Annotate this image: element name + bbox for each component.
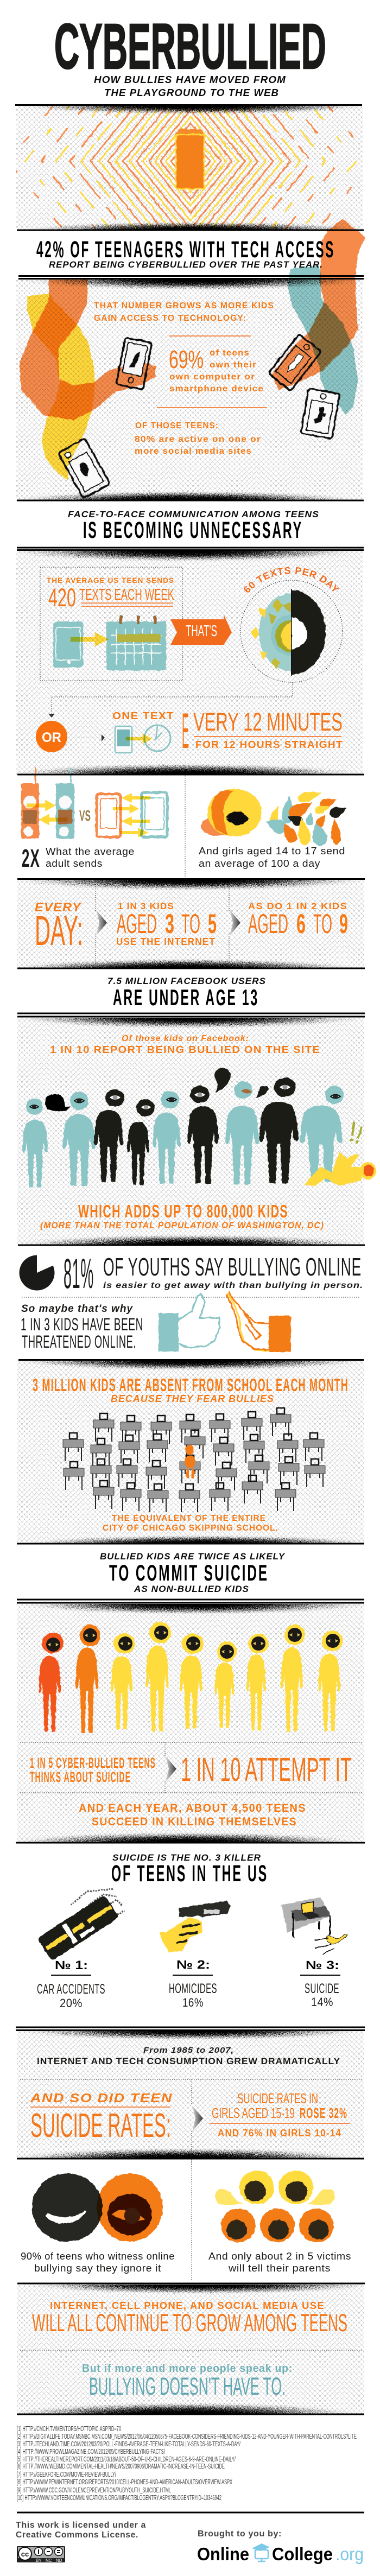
text block: aged 6 to 9: 9 (339, 909, 348, 939)
text block: one text every 12 minutes: FOR 12 HOURS STRAIGHT (195, 739, 343, 750)
text block: 2 in 5 tell parents: And only about 2 in 5 victims (208, 2250, 351, 2262)
text block: aged 6 to 9: TO (313, 909, 332, 939)
stat: 81 percent of youths (64, 1249, 363, 1297)
text block: equivalent of chicago: CITY OF CHICAGO SKIPPING SCHOOL. (103, 1524, 278, 1533)
icon: concentric radiating diamonds (16, 106, 357, 229)
icon: orange phone (175, 129, 204, 189)
text block: technology access: own computer or (169, 372, 255, 382)
footer: brought to you by: Online (197, 2544, 249, 2564)
heading: no. 3 killer of teens (111, 1853, 268, 1887)
stat: no. 3 suicide: 14% (311, 1995, 333, 2009)
text block: 2x what adults send: adult sends (46, 858, 103, 869)
stat: no. 3 suicide: № 3: (306, 1958, 339, 1972)
text block: 90 percent ignore (21, 2250, 175, 2274)
icon: phone and clock (115, 725, 170, 753)
illustration: crowd of kids with a bully (22, 1068, 376, 1188)
illustration: ignoring heads (32, 2173, 163, 2242)
text block: kids bullied on facebook: 1 IN 10 REPORT BEING BULLIED ON THE SITE (50, 1044, 320, 1055)
text block: suicide rates in girls: SUICIDE RATES IN (237, 2090, 318, 2107)
arrow: that's ribbon (170, 614, 232, 645)
illustration: smartphones exchanging texts (97, 792, 167, 837)
text block: threatened online: THREATENED ONLINE. (22, 1332, 136, 1352)
icon: monitor with graduation cap (252, 2543, 270, 2561)
text block: 2x what adults send: What the average (46, 846, 135, 857)
footer: brought to you by (197, 2529, 364, 2564)
footer: brought to you by: .org (335, 2544, 364, 2564)
icon: phone dropped from blue hand (301, 389, 340, 439)
heading: twice as likely to commit suicide: BULLIED KIDS ARE TWICE AS LIKELY (100, 1552, 286, 1562)
text block: 2 in 5 tell parents (208, 2250, 351, 2274)
arrow: dotted connector from clock to OR (48, 682, 293, 718)
source references: [1] HTTP://CMCH.TV/MENTORS/HOTTOPIC.ASP?ID=70 (17, 2425, 121, 2433)
text block: 1985 to 2007: From 1985 to 2007, (143, 2046, 234, 2055)
text block: technology access: of teens (210, 348, 250, 358)
icon: phone held by yellow hand (58, 438, 110, 499)
text block: technology access: own their (210, 360, 257, 370)
panel: facebook background (17, 1018, 364, 1245)
heading: twice as likely to commit suicide: TO COMMIT SUICIDE (109, 1560, 269, 1585)
illustration: right orange arm (273, 220, 364, 389)
stat: no. 3 suicide (300, 1958, 340, 2009)
text block: 1985 to 2007 (37, 2046, 340, 2066)
text block: 1 in 5 think, 1 in 10 attempt: THINKS ABOUT SUICIDE (30, 1769, 131, 1785)
icon: phone held in left hand (116, 338, 152, 390)
panel: suicide rates background (17, 2031, 364, 2159)
text block: equivalent of chicago: THE EQUIVALENT OF THE ENTIRE (112, 1514, 266, 1523)
text block: suicide rates in girls: ROSE 32% (300, 2105, 347, 2121)
illustration: left orange arm (21, 280, 155, 419)
text block: bullying doesn't have to: But if more and more people speak up: (82, 2363, 293, 2375)
stat: no. 2 homicides: 16% (182, 1996, 204, 2009)
arrow: that's ribbon: THAT'S (186, 623, 217, 640)
licence note (16, 2521, 146, 2540)
text block: aged 6 to 9: 6 (296, 909, 306, 939)
text block: and so did teen suicide rates (30, 2091, 173, 2144)
source references: [10] HTTP://WWW.VOXTEENCOMMUNICATIONS.ORG/IMPACT/BLOGENTRY.ASPX?BLOGENTRYID=10346942 (17, 2493, 221, 2502)
icon: OR circle: OR (42, 730, 61, 745)
arrow: chevron to rates (192, 2105, 203, 2131)
illustration: brick phones exchanging texts (21, 767, 74, 839)
text block: one text every 12 minutes: ONE TEXT (112, 710, 174, 721)
text block: kids bullied on facebook: Of those kids on Facebook: (122, 1034, 249, 1043)
heading: facebook users under 13: 7.5 MILLION FACEBOOK USERS (107, 976, 266, 986)
icon: creative commons badge: ND (56, 2558, 62, 2563)
text block: aged 3 to 5: AGED (117, 909, 157, 939)
icon: creative commons badge: NC (46, 2558, 52, 2563)
text block: 800,000 kids: (MORE THAN THE TOTAL POPULATION OF WASHINGTON, DC) (40, 1221, 324, 1230)
icon: orange kid at desk (185, 1445, 195, 1479)
callout: 420 texts each week box: THE AVERAGE US TEEN SENDS (47, 576, 174, 585)
text block: technology access: 80% are active on one or (135, 435, 261, 444)
callout: 420 texts each week box: 420 (48, 583, 76, 612)
stat: no. 3 suicide: SUICIDE (305, 1981, 339, 1996)
stat: no. 2 homicides: HOMICIDES (169, 1981, 217, 1996)
text block: 4,500 teens: SUCCEED IN KILLING THEMSELVES (92, 1816, 297, 1828)
text block: 800,000 kids (40, 1201, 324, 1230)
text block: aged 3 to 5 (116, 901, 217, 947)
text block: 3 million kids absent (33, 1375, 349, 1404)
icon: yellow fallen kid (304, 1152, 363, 1186)
text block: aged 6 to 9: AGED (248, 909, 288, 939)
panel text: every day: EVERY (35, 900, 82, 914)
arrow: brick phone texts (27, 800, 67, 826)
text block: girls 14 to 17 (199, 846, 345, 869)
icon: speeding car (37, 1889, 125, 1961)
text block: 2x what adults send: 2X (22, 844, 40, 872)
text block: technology access (94, 301, 274, 456)
text block: technology access: THAT NUMBER GROWS AS MORE KIDS (94, 301, 274, 310)
text block: one text every 12 minutes: E (182, 703, 189, 759)
source references: [4] HTTP://WWW.PROWLMAGAZINE.COM/2012/05/CYBERBULLYING-FACTS/ (17, 2447, 165, 2456)
subtitle (94, 74, 286, 98)
text block: aged 6 to 9 (248, 901, 348, 939)
icon: handgun in hand (159, 1901, 230, 1952)
source references (17, 2425, 357, 2502)
icon: black speech bubbles (45, 1094, 71, 1111)
stat: no. 1 car accidents: CAR ACCIDENTS (37, 1982, 105, 1997)
text block: technology access: 69% (169, 345, 204, 373)
illustration: right blue arm (289, 266, 357, 414)
text block: 1985 to 2007: INTERNET AND TECH CONSUMPTION GREW DRAMATICALLY (37, 2056, 340, 2066)
footer: brought to you by: College (272, 2544, 333, 2564)
panel: texting background (16, 551, 363, 775)
text block: threatened online: 1 IN 3 KIDS HAVE BEEN (21, 1315, 143, 1334)
illustration: row of nine teens (39, 1622, 343, 1733)
text block: technology access: GAIN ACCESS TO TECHNOLOGY: (94, 314, 246, 323)
stat: no. 2 homicides: № 2: (176, 1958, 210, 1971)
arrow: OR to one text (68, 734, 105, 741)
source references: [9] HTTP://WWW.CDC.GOV/VIOLENCEPREVENTION/PUB/YOUTH_SUICIDE.HTML (17, 2486, 171, 2494)
text block: and so did teen suicide rates: AND SO DID TEEN (30, 2091, 173, 2105)
icon: creative commons badge: cc (21, 2550, 29, 2558)
text block: threatened online: So maybe that's why (21, 1303, 133, 1315)
illustration: left yellow arm (28, 295, 94, 479)
icon: desk with laptop and tipped chair (281, 1897, 347, 1954)
chart: 81 percent pie wedge (20, 1255, 54, 1291)
arrow: chevron to 3 to 5 (96, 910, 107, 936)
licence note: Creative Commons License. (16, 2530, 138, 2540)
icon: exclamation marks (350, 1121, 363, 1144)
text block: 90 percent ignore: bullying say they ignore it (34, 2262, 161, 2274)
text block: aged 3 to 5: 3 (165, 909, 174, 939)
callout: 420 texts each week box (40, 567, 182, 681)
text block: technology access: OF THOSE TEENS: (135, 421, 219, 430)
text block: aged 3 to 5: TO (181, 909, 200, 939)
icon: phone held in right orange hand (268, 334, 321, 391)
stat: no. 1 car accidents: № 1: (55, 1958, 88, 1972)
illustration: classroom desks (63, 1408, 325, 1512)
text block: aged 3 to 5: 5 (208, 909, 217, 939)
panel text: every day (35, 882, 348, 963)
callout: 420 texts each week box: TEXTS EACH WEEK (79, 586, 174, 604)
panel: suicide figures background (17, 1604, 364, 1843)
panel: absent from school background (17, 1361, 364, 1544)
icon: OR circle (36, 721, 67, 752)
text block: use will continue to grow: INTERNET, CELL PHONE, AND SOCIAL MEDIA USE (50, 2300, 325, 2311)
heading: facebook users under 13 (107, 976, 266, 1010)
text block: girls 14 to 17: an average of 100 a day (199, 858, 320, 869)
source references: [5] HTTP://THEREALTIMEREPORT.COM/2011/03/18/ABOUT-50-OF-U-S-CHILDREN-AGES-6-9-ARE-ONLINE-DAILY/ (17, 2455, 236, 2463)
text block: bullying doesn't have to (82, 2363, 293, 2400)
panel: every day background (17, 880, 364, 968)
text block: suicide rates in girls (210, 2090, 350, 2139)
text block: 1 in 5 think, 1 in 10 attempt: 1 IN 5 CYBER-BULLIED TEENS (30, 1755, 156, 1771)
text block: equivalent of chicago (103, 1514, 278, 1533)
illustration: five victim heads (215, 2171, 335, 2242)
panel text: every day: DAY: (35, 908, 83, 954)
licence note: This work is licensed under a (16, 2521, 146, 2530)
footer: brought to you by: Brought to you by: (198, 2529, 282, 2539)
illustration: girl head with speech drops (201, 788, 349, 848)
heading: face to face communication (68, 510, 319, 543)
text block: aged 6 to 9: AS DO 1 IN 2 KIDS (248, 901, 347, 911)
arrow: chevron to 6 to 9 (230, 910, 240, 936)
text block: 90 percent ignore: 90% of teens who witness online (21, 2250, 175, 2262)
text block: one text every 12 minutes (112, 703, 343, 759)
label: VS: VS (79, 807, 91, 824)
stat: no. 1 car accidents (37, 1958, 105, 2010)
heading: twice as likely to commit suicide (100, 1552, 286, 1594)
icon: pointing threatening hand (226, 1292, 291, 1352)
icon: creative commons badge: BY (36, 2558, 42, 2563)
text block: 2 in 5 tell parents: will tell their parents (228, 2262, 331, 2274)
text block: 1 in 5 think, 1 in 10 attempt (20, 1742, 363, 1793)
arrow: chevron to 1 in 10 (166, 1756, 176, 1782)
arrow: smartphone texts (113, 793, 150, 837)
text block: suicide rates in girls: GIRLS AGED 15-19 (212, 2105, 295, 2121)
text block: and so did teen suicide rates: SUICIDE RATES: (30, 2107, 171, 2144)
text block: 4,500 teens: AND EACH YEAR, ABOUT 4,500 TEENS (79, 1802, 306, 1814)
text block: kids bullied on facebook (50, 1034, 320, 1055)
stat: no. 1 car accidents: 20% (60, 1996, 83, 2010)
text block: aged 3 to 5: 1 IN 3 KIDS (118, 901, 174, 911)
subtitle: HOW BULLIES HAVE MOVED FROM (94, 74, 286, 85)
subtitle: THE PLAYGROUND TO THE WEB (104, 87, 279, 98)
chart: 60 texts per day sun and moon clock: 60 TEXTS PER DAY (244, 567, 340, 593)
text block: girls 14 to 17: And girls aged 14 to 17 send (199, 846, 345, 856)
stat: 81 percent of youths: is easier to get away with than bullying in person. (103, 1281, 363, 1290)
icon: sun half (251, 593, 291, 671)
icon: calendar (106, 616, 166, 670)
text block: threatened online (21, 1303, 143, 1352)
heading: facebook users under 13: ARE UNDER AGE 13 (113, 985, 259, 1010)
icon: creative commons badge (17, 2546, 65, 2563)
source references: [7] HTTP://GEEKFORE.COM/MOVIE-REVIEW-BULLY/ (17, 2470, 116, 2478)
text block: 2x what adults send (22, 844, 135, 872)
text block: 4,500 teens (79, 1802, 306, 1828)
heading: no. 3 killer of teens: SUICIDE IS THE NO. 3 KILLER (112, 1853, 261, 1863)
arrow: yellow phone to calendar (71, 632, 109, 646)
text block: technology access: more social media sites (135, 447, 252, 456)
heading: face to face communication: FACE-TO-FACE COMMUNICATION AMONG TEENS (68, 510, 319, 519)
text block: aged 3 to 5: USE THE INTERNET (116, 936, 216, 947)
heading: twice as likely to commit suicide: AS NON-BULLIED KIDS (134, 1584, 249, 1594)
stat: no. 2 homicides (169, 1958, 217, 2009)
text block: suicide rates in girls: AND 76% IN GIRLS 10-14 (218, 2128, 341, 2139)
icon: thumbs up hand (159, 1293, 220, 1352)
text block: 3 million kids absent: BECAUSE THEY FEAR BULLIES (111, 1393, 274, 1404)
icon: moon half (292, 590, 326, 675)
source references: [6] HTTP://WWW.WEBMD.COM/MENTAL-HEALTH/NEWS/20070906/DRAMATIC-INCREASE-IN-TEEN-SUICIDE (17, 2462, 225, 2470)
stat heading: 42 percent of teenagers: REPORT BEING CYBERBULLIED OVER THE PAST YEAR. (49, 260, 323, 270)
panel: closing message background (17, 2285, 364, 2414)
panel: hero with phone (16, 106, 363, 229)
text block: technology access: smartphone device (169, 384, 264, 394)
stat: 81 percent of youths: 81% (64, 1249, 94, 1297)
icon: teal phone (53, 621, 83, 668)
panel: technology access background (16, 280, 363, 500)
chart: 60 texts per day sun and moon clock (240, 567, 343, 683)
